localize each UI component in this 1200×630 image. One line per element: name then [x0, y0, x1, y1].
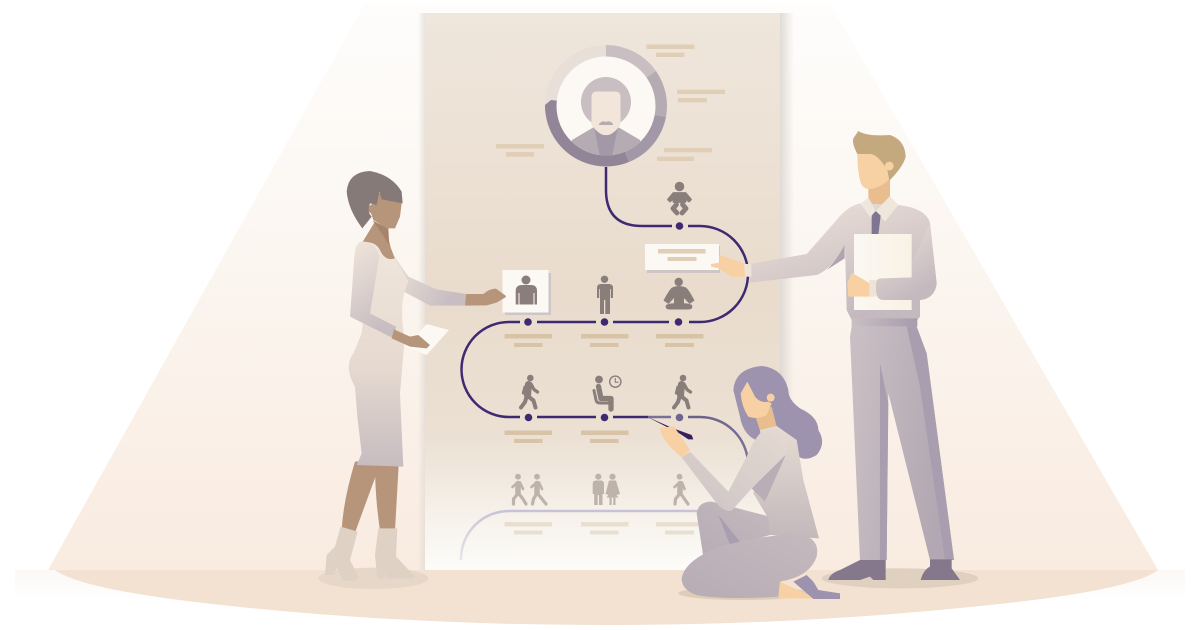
supporting hand: [847, 273, 870, 297]
woman kneeling: [647, 366, 840, 600]
shoe: [793, 575, 840, 599]
floor shadow: [678, 587, 808, 600]
thigh crease: [718, 515, 740, 545]
icon: clock: [610, 376, 621, 387]
icon: walker row 2 left: [521, 375, 538, 408]
front thigh: [682, 535, 817, 598]
face: [857, 148, 893, 189]
icon: baby: [668, 182, 691, 213]
far arm: [388, 247, 466, 306]
armpit shadow: [827, 245, 845, 270]
man standing right: [711, 131, 978, 588]
ear: [885, 162, 894, 170]
supporting arm: [876, 223, 937, 300]
placeholder labels row 2: [504, 430, 628, 443]
drawing hand: [659, 426, 690, 457]
near arm: [350, 242, 396, 338]
card: torso icon: [502, 270, 551, 315]
ear: [368, 204, 377, 214]
hair back: [733, 366, 822, 459]
floor reflection band: [15, 570, 1185, 600]
shoes: [828, 559, 960, 580]
face: [741, 382, 772, 418]
floor ellipse: [55, 570, 1158, 625]
placeholder labels around donut: [496, 44, 725, 161]
pen: [647, 417, 693, 439]
hair: [347, 171, 403, 228]
underarm shadow: [752, 455, 786, 502]
icon: walker row 2 right: [674, 375, 690, 408]
cuff: [869, 280, 876, 297]
trousers: [850, 327, 954, 560]
timeline nodes: [524, 222, 683, 421]
woman standing left: [318, 171, 506, 589]
journey timeline path: [461, 167, 748, 560]
paper: [405, 324, 449, 355]
icon: walker row 3: [674, 474, 688, 504]
placeholder labels row 1: [504, 334, 704, 347]
trouser shading: [880, 327, 954, 560]
poster panel: [418, 13, 794, 570]
sweater body: [753, 426, 819, 538]
pointing cuff: [744, 264, 751, 277]
collar: [861, 196, 898, 222]
portrait of man: [572, 77, 640, 156]
hair: [853, 131, 906, 181]
donut chart ring: [545, 45, 667, 167]
placeholder labels row 3: [504, 522, 704, 534]
belt: [852, 318, 917, 327]
icon: man and woman: [593, 474, 620, 505]
floor shadow: [822, 568, 978, 588]
neck: [362, 221, 395, 260]
far hand: [465, 289, 506, 306]
neck: [868, 178, 890, 212]
icon: pair of walkers: [512, 474, 546, 504]
card: held label: [645, 244, 720, 273]
icon: meditating person: [664, 278, 694, 310]
donut portrait: [545, 45, 667, 167]
dress: [349, 242, 408, 467]
back thigh: [697, 502, 770, 557]
shirt body: [750, 203, 937, 320]
pointing hand: [711, 255, 745, 277]
boots: [325, 527, 415, 581]
icon: seated person: [594, 376, 611, 409]
legs: [342, 460, 399, 533]
head: [370, 192, 402, 228]
icon: torso: [516, 276, 537, 304]
foot: [778, 582, 817, 598]
near hand: [392, 329, 430, 348]
neck: [755, 407, 777, 431]
floor shadow: [318, 568, 428, 589]
icon: standing man: [597, 276, 613, 314]
ear: [767, 394, 775, 402]
drawing arm: [682, 428, 788, 511]
tie: [872, 211, 881, 235]
clipboard: [854, 234, 912, 310]
